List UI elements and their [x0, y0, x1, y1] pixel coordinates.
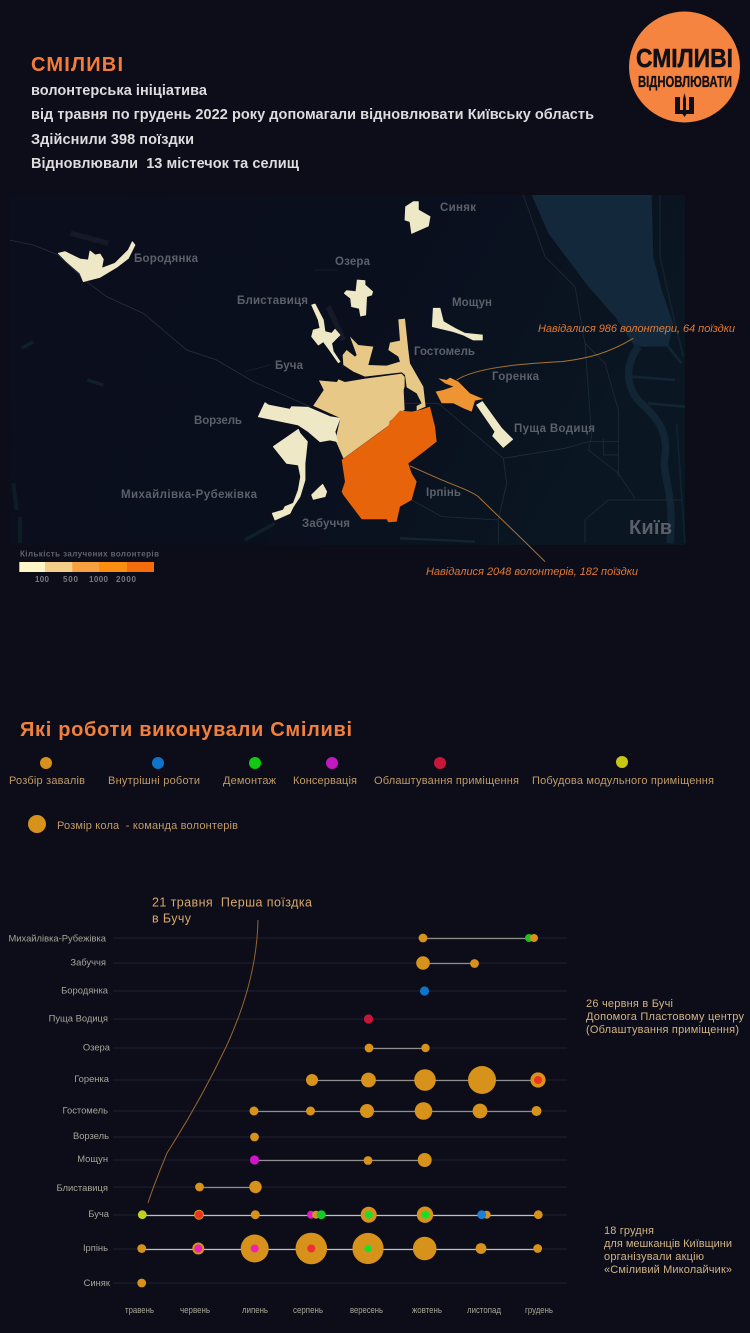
month axis: червень [180, 1305, 210, 1316]
row labels: Блиставиця [56, 1182, 108, 1193]
row: Забуччя [416, 956, 479, 970]
size legend: Розмір кола - команда волонтерів [57, 820, 238, 832]
activity legend [9, 756, 714, 833]
row labels: Буча [88, 1208, 110, 1219]
map place labels: Забуччя [302, 518, 350, 530]
row: Озера [365, 1044, 430, 1052]
annotation: 18 December: організували акцію [604, 1251, 704, 1263]
month axis: листопад [467, 1305, 501, 1316]
activity legend: Демонтаж [223, 775, 277, 787]
map place labels [121, 202, 672, 539]
map place labels: Блиставиця [237, 295, 308, 307]
towns line: Відновлювали 13 містечок та селищ [31, 156, 300, 172]
callout: Горенка [457, 323, 735, 380]
row labels: Ірпінь [83, 1242, 108, 1253]
row labels: Горенка [74, 1073, 110, 1084]
callout: Горенка: Навідалися 986 волонтери, 64 поїздки [538, 323, 735, 335]
map legend [19, 550, 159, 584]
map background [10, 195, 685, 545]
map place labels: Озера [335, 256, 371, 268]
annotation: 18 December: для мешканців Київщини [604, 1238, 732, 1250]
region: Озера [344, 280, 373, 316]
map place labels: Синяк [440, 202, 476, 214]
water and roads [9, 195, 685, 543]
map legend: 500 [63, 575, 79, 584]
row: Буча [138, 1206, 543, 1223]
row: Гостомель [250, 1102, 542, 1120]
row: Мощун [250, 1153, 432, 1167]
activity legend: Консервація [293, 775, 357, 787]
timeline bubble chart [8, 932, 567, 1316]
map place labels: Київ [629, 517, 672, 539]
size legend [28, 815, 238, 833]
header text block [31, 54, 594, 172]
row: Ірпінь [137, 1233, 542, 1264]
row labels: Мощун [77, 1153, 108, 1164]
region: Мощун [432, 308, 482, 340]
row: Синяк [137, 1279, 146, 1287]
annotation: 18 December: 18 грудня [604, 1225, 654, 1237]
annotation: first trip [148, 896, 312, 1203]
row labels: Озера [83, 1042, 111, 1052]
region: Гостомель [343, 319, 426, 411]
row labels [8, 932, 111, 1288]
section heading: Які роботи виконували Сміливі [20, 719, 352, 741]
region: Забуччя [312, 484, 327, 499]
logo badge [629, 12, 740, 122]
row: Пуща Водиця [364, 1014, 373, 1024]
row: Михайлівка-Рубежівка [419, 934, 538, 942]
map place labels: Гостомель [414, 346, 475, 358]
subtitle: волонтерська ініціатива [31, 83, 208, 99]
month axis: травень [125, 1305, 154, 1316]
row labels: Михайлівка-Рубежівка [8, 932, 107, 944]
annotation: first trip: в Бучу [152, 912, 192, 926]
annotation: first trip: 21 травня Перша поїздка [152, 896, 312, 910]
row labels: Забуччя [70, 956, 106, 968]
region: Синяк [405, 202, 430, 233]
month axis: серпень [293, 1305, 323, 1316]
row: Горенка [306, 1066, 546, 1094]
month axis: грудень [525, 1305, 553, 1316]
annotation: 18 December: «Сміливий Миколайчик» [604, 1264, 732, 1276]
annotation: 26 June: Допомога Пластовому центру [586, 1011, 744, 1023]
row labels: Синяк [84, 1277, 111, 1288]
title: СМІЛИВІ [31, 54, 123, 76]
annotation: 18 December [604, 1225, 732, 1276]
activity legend: Розбір завалів [9, 775, 85, 787]
region: Буча [313, 373, 405, 459]
period line: від травня по грудень 2022 року допомагали відновлювати Київську область [31, 107, 594, 123]
region: Бородянка [58, 242, 135, 282]
map place labels: Горенка [492, 371, 540, 383]
map legend: 2000 [116, 575, 137, 584]
map legend: Кількість залучених волонтерів [20, 550, 159, 558]
row: Ворзель [250, 1133, 259, 1141]
map legend: 1000 [89, 575, 109, 584]
connector lines [142, 938, 538, 1250]
callout: Ірпінь [410, 466, 638, 578]
annotation: 26 June: 26 червня в Бучі [586, 998, 673, 1010]
activity legend: Облаштування приміщення [374, 775, 519, 787]
grid lines [113, 938, 567, 1283]
region: Пуща Водиця [477, 402, 513, 447]
region: Блиставиця [312, 304, 340, 363]
month axis: жовтень [412, 1305, 442, 1316]
map place labels: Мощун [452, 297, 492, 309]
annotation: 26 June: (Облаштування приміщення) [586, 1024, 739, 1036]
row: Блиставиця [195, 1181, 262, 1193]
month axis [125, 1305, 553, 1316]
row labels: Гостомель [63, 1104, 108, 1116]
icon: trident [675, 93, 694, 117]
row labels: Ворзель [73, 1130, 109, 1141]
logo badge: СМІЛИВІ [636, 43, 733, 73]
row labels: Бородянка [61, 984, 109, 996]
map place labels: Пуща Водиця [514, 423, 595, 435]
map place labels: Буча [275, 360, 304, 372]
activity legend: Внутрішні роботи [108, 775, 200, 787]
activity legend: Побудова модульного приміщення [532, 775, 714, 787]
annotation: 26 June [586, 998, 744, 1036]
map place labels: Бородянка [134, 253, 199, 265]
map panel [9, 195, 685, 545]
region: Михайлівка-Рубежівка [272, 429, 307, 520]
region: Горенка [436, 378, 483, 412]
trips line: Здійснили 398 поїздки [31, 132, 194, 148]
callout: Ірпінь: Навідалися 2048 волонтерів, 182 поїздки [426, 566, 638, 578]
map legend: 100 [35, 575, 50, 584]
map place labels: Ірпінь [426, 487, 461, 499]
region: Ворзель [258, 403, 340, 442]
month axis: липень [242, 1305, 268, 1316]
month axis: вересень [350, 1305, 383, 1316]
region: Ірпінь [342, 407, 437, 522]
map place labels: Михайлівка-Рубежівка [121, 489, 258, 501]
row: Бородянка [420, 986, 429, 996]
row labels: Пуща Водиця [49, 1012, 108, 1024]
map place labels: Ворзель [194, 415, 242, 427]
